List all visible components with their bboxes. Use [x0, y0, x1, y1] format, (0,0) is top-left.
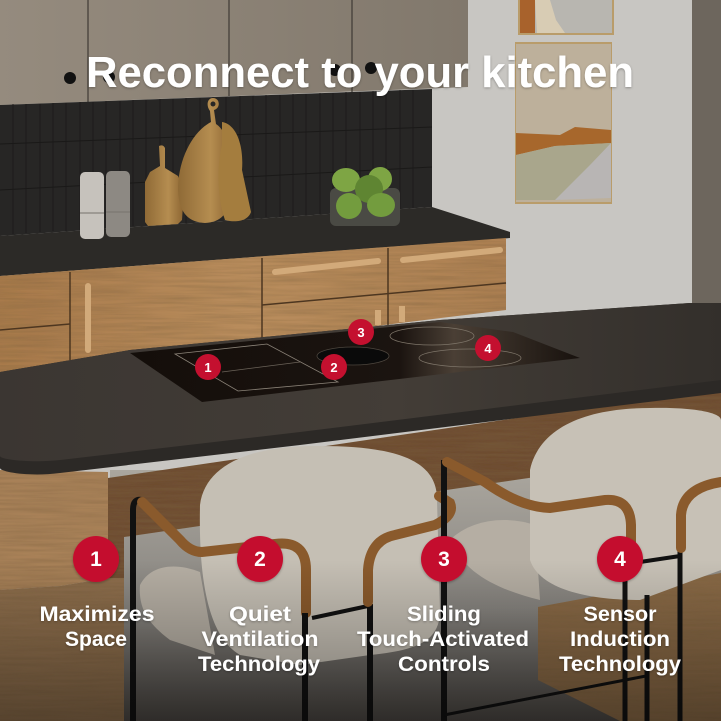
feature 3: sliding touch-activated controls: Sliding: [407, 602, 481, 626]
feature 2: quiet ventilation technology: 2: [254, 548, 266, 571]
backsplash tiles: [0, 89, 432, 236]
bottom shade: [0, 560, 721, 721]
feature 3: sliding touch-activated controls: Controls: [398, 652, 490, 676]
left stool chair: [133, 446, 451, 721]
feature 2: quiet ventilation technology: Quiet: [229, 602, 291, 626]
cooktop marker 4: 4: [484, 341, 492, 356]
induction cooktop with ventilation: [130, 322, 580, 402]
feature 1: maximizes space: [40, 536, 155, 651]
feature 3: sliding touch-activated controls: [357, 536, 529, 676]
upper cabinets: [0, 0, 468, 105]
back countertop: [0, 207, 510, 276]
feature 4: sensor induction technology: [559, 536, 681, 676]
island wood base: [0, 388, 721, 721]
cooktop marker 2: 2: [330, 360, 338, 375]
wall paintings: [515, 0, 614, 204]
feature 4: sensor induction technology: Induction: [570, 627, 670, 651]
grinders: [80, 171, 130, 239]
feature 3: sliding touch-activated controls: Touch-Activated: [357, 627, 529, 651]
feature 2: quiet ventilation technology: [198, 536, 320, 676]
cooktop marker 4: [475, 335, 501, 361]
cooktop marker 2: [321, 354, 347, 380]
right stool chair: [444, 408, 721, 721]
feature 2: quiet ventilation technology: Technology: [198, 652, 320, 676]
lower cabinets: [0, 238, 506, 372]
title: Reconnect to your kitchen: [86, 48, 634, 97]
feature 2: quiet ventilation technology: Ventilation: [202, 627, 318, 651]
cooktop marker 3: 3: [357, 325, 365, 340]
floor: [110, 470, 721, 721]
apples in glass bowl: [330, 167, 400, 226]
feature 4: sensor induction technology: Sensor: [584, 602, 657, 626]
cooktop marker 3: [348, 319, 374, 345]
feature 3: sliding touch-activated controls: 3: [438, 548, 450, 571]
cooktop marker 1: 1: [204, 360, 212, 375]
cooktop marker 1: [195, 354, 221, 380]
feature 1: maximizes space: Maximizes: [40, 602, 155, 626]
feature 4: sensor induction technology: Technology: [559, 652, 681, 676]
cutting boards: [145, 98, 251, 226]
feature 1: maximizes space: 1: [90, 548, 102, 571]
island countertop: [0, 303, 721, 474]
feature 4: sensor induction technology: 4: [614, 548, 626, 571]
feature 1: maximizes space: Space: [65, 627, 127, 651]
